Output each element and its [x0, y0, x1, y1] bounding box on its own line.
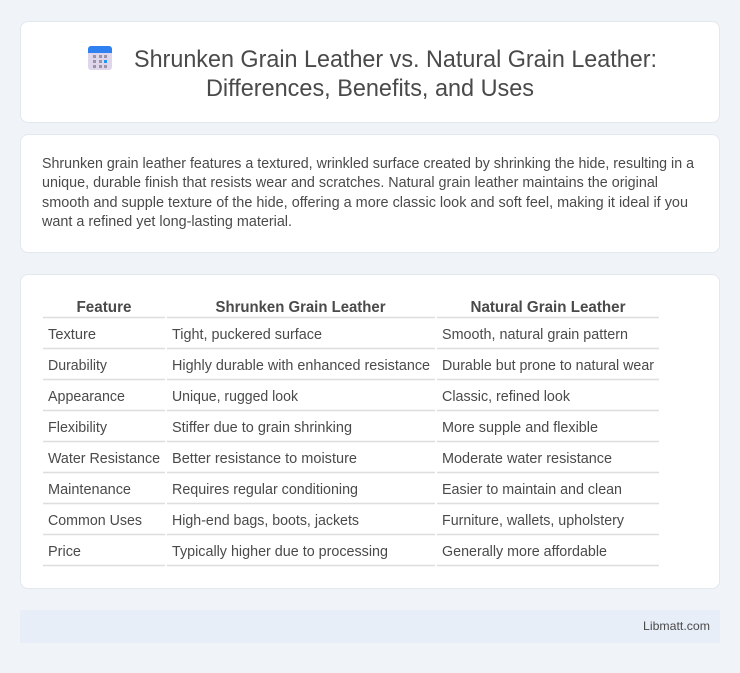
row: texture: Tight, puckered surface — [172, 327, 322, 343]
text block: intro paragraph: smooth and supple texture of the hide, offering a more classic look and soft feel, making it ideal if you — [42, 195, 688, 211]
row: water resistance: Better resistance to moisture — [172, 451, 357, 467]
row: durability: Durable but prone to natural wear — [442, 358, 654, 374]
row: appearance: Appearance — [48, 389, 125, 405]
row: maintenance: Requires regular conditioning — [172, 482, 358, 498]
table: comparison — [43, 299, 659, 566]
row: maintenance: Maintenance — [48, 482, 131, 498]
panel: intro card — [20, 134, 720, 253]
row: flexibility: Stiffer due to grain shrinking — [172, 420, 352, 436]
table header: Shrunken Grain Leather — [216, 299, 386, 316]
row: common uses — [48, 513, 625, 529]
panel: footer bar — [20, 610, 720, 643]
row: durability: Durability — [48, 358, 108, 374]
row: flexibility: More supple and flexible — [442, 420, 598, 436]
text block: intro paragraph: want a refined yet long-lasting material. — [41, 214, 292, 230]
panel: title card — [20, 21, 720, 123]
text block: intro paragraph — [41, 156, 695, 230]
text block: intro paragraph: unique, durable finish that resists wear and scratches. Natural grain leather maintains the original — [42, 175, 658, 191]
row: texture: Texture — [48, 327, 96, 343]
row: water resistance — [48, 451, 612, 467]
row: common uses: Furniture, wallets, upholstery — [442, 513, 625, 529]
row: price: Generally more affordable — [442, 544, 607, 560]
icon: calendar — [88, 46, 112, 70]
row: durability — [48, 358, 654, 374]
table header: Feature — [76, 299, 132, 316]
row: appearance: Classic, refined look — [442, 389, 571, 405]
table header: Natural Grain Leather — [470, 299, 626, 316]
title — [134, 46, 657, 102]
row: appearance: Unique, rugged look — [172, 389, 299, 405]
title: Differences, Benefits, and Uses — [206, 75, 534, 102]
row: durability: Highly durable with enhanced resistance — [172, 358, 430, 374]
row: common uses: High-end bags, boots, jackets — [172, 513, 359, 529]
row: texture — [48, 327, 628, 343]
row: appearance — [48, 389, 571, 405]
row: price: Typically higher due to processing — [172, 544, 388, 560]
row: common uses: Common Uses — [48, 513, 142, 529]
row: water resistance: Water Resistance — [48, 451, 160, 467]
row: flexibility: Flexibility — [48, 420, 108, 436]
row: texture: Smooth, natural grain pattern — [442, 327, 628, 343]
row: maintenance: Easier to maintain and clean — [442, 482, 622, 498]
row: price: Price — [48, 544, 81, 560]
text block: intro paragraph: Shrunken grain leather features a textured, wrinkled surface created by shrinking the hide, resulting in a — [42, 156, 695, 172]
panel: table card — [20, 274, 720, 589]
row: maintenance — [48, 482, 622, 498]
row: price — [48, 544, 607, 560]
title: Shrunken Grain Leather vs. Natural Grain Leather: — [134, 46, 657, 73]
row: flexibility — [48, 420, 598, 436]
row: water resistance: Moderate water resistance — [442, 451, 612, 467]
footer text: Libmatt.com — [643, 619, 710, 633]
table header — [76, 299, 626, 316]
